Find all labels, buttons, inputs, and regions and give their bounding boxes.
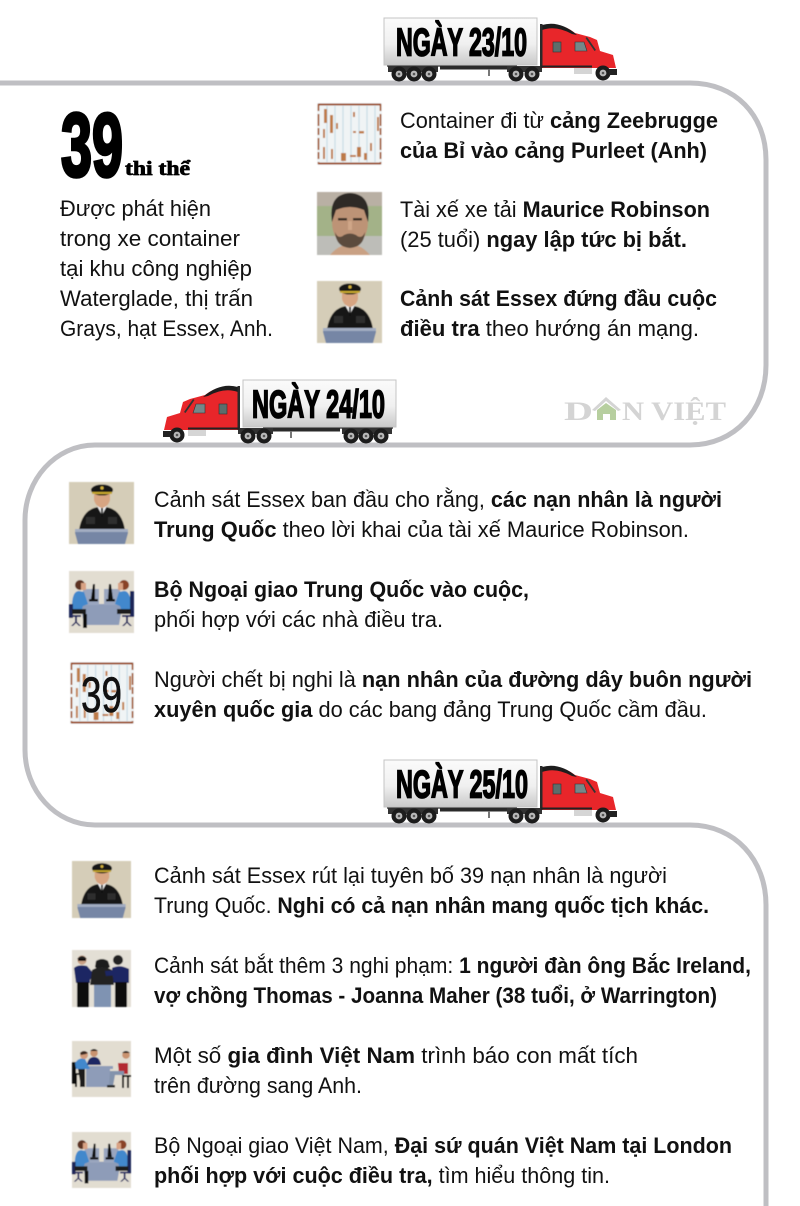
text: trafficking suspicion: Người chết bị nghi là nạn nhân của đường dây buôn người [154,667,752,692]
logo: Dan Viet [564,397,726,426]
date heading: 25/10: NGÀY 25/10 [396,762,528,806]
date heading: 23/10: NGÀY 23/10 [396,20,527,64]
text: police retraction [154,863,709,918]
truck: 25/10 [384,760,617,824]
text: initial claim [154,487,722,542]
icon: police officer [317,281,382,343]
text: Vietnamese families: Một số gia đình Việt Nam trình báo con mất tích [154,1043,638,1068]
text: driver arrested: (25 tuổi) ngay lập tức bị bắt. [400,227,687,252]
text block: discovery location [60,196,273,341]
text: police retraction: Cảnh sát Essex rút lại tuyên bố 39 nạn nhân là người [154,863,667,888]
text: three more suspects [154,953,751,1008]
text: container route: của Bỉ vào cảng Purleet (Anh) [400,138,707,163]
text: initial claim: Trung Quốc theo lời khai của tài xế Maurice Robinson. [154,517,689,542]
text block: discovery location: Được phát hiện [60,196,211,221]
icon: arrest [72,950,131,1007]
text: Essex police lead: điều tra theo hướng án mạng. [400,316,699,341]
icon: rusty container [317,103,382,165]
text: Essex police lead: Cảnh sát Essex đứng đầu cuộc [400,286,717,311]
text: Vietnamese families: trên đường sang Anh. [154,1073,362,1098]
text: initial claim: Cảnh sát Essex ban đầu cho rằng, các nạn nhân là người [154,487,722,512]
text block: discovery location: tại khu công nghiệp [60,256,252,281]
truck: 24/10 [163,380,396,444]
text block: discovery location: Waterglade, thị trấn [60,286,253,311]
text: Essex police lead [400,286,717,341]
text: police retraction: Trung Quốc. Nghi có cả nạn nhân mang quốc tịch khác. [154,893,709,918]
icon: police officer [69,482,134,544]
icon: family report meeting [72,1041,131,1097]
text: three more suspects: Cảnh sát bắt thêm 3 nghi phạm: 1 người đàn ông Bắc Ireland, [154,953,751,978]
logo: Dan Viet: D [564,397,593,426]
truck: 23/10 [384,18,617,82]
text: driver arrested [400,197,710,252]
text: three more suspects: vợ chồng Thomas - Joanna Maher (38 tuổi, ở Warrington) [154,983,717,1008]
icon: call centre desk [72,1132,131,1188]
logo: Dan Viet: N VIỆT [622,397,726,426]
date heading: 24/10: NGÀY 24/10 [252,382,385,426]
text: Vietnamese ministry: Bộ Ngoại giao Việt Nam, Đại sứ quán Việt Nam tại London [154,1133,732,1158]
text block: discovery location: Grays, hạt Essex, Anh. [60,316,273,341]
text: Chinese foreign ministry [154,577,529,632]
icon: police officer [72,861,131,918]
icon: call centre desk [69,571,134,633]
text: Vietnamese ministry: phối hợp với cuộc điều tra, tìm hiểu thông tin. [154,1163,610,1188]
text: Vietnamese families [154,1043,638,1098]
icon: container with 39: 39 [81,667,122,723]
text: Chinese foreign ministry: phối hợp với các nhà điều tra. [154,607,443,632]
icon: driver portrait [317,192,382,255]
text: trafficking suspicion [154,667,752,722]
text: driver arrested: Tài xế xe tải Maurice Robinson [400,197,710,222]
text: container route: Container đi từ cảng Zeebrugge [400,108,718,133]
text: container route [400,108,718,163]
text: trafficking suspicion: xuyên quốc gia do các bang đảng Trung Quốc cầm đầu. [154,697,707,722]
text block: discovery location: trong xe container [60,226,240,251]
text: Chinese foreign ministry: Bộ Ngoại giao Trung Quốc vào cuộc, [154,577,529,602]
headline: 39 bodies: 39 [61,96,123,196]
headline: 39 bodies: thi thể [125,158,191,180]
text: Vietnamese ministry [154,1133,732,1188]
